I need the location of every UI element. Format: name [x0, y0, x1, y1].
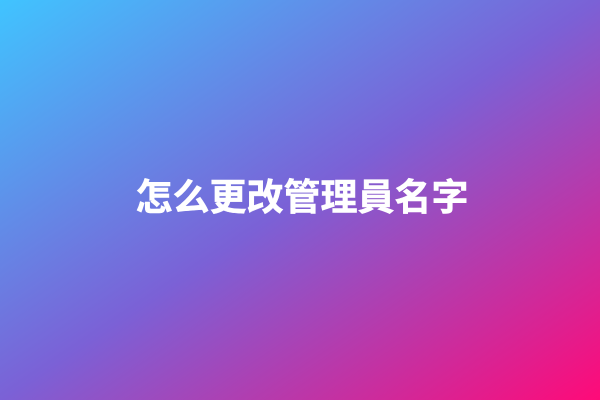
title: 怎么更改管理員名字	[136, 177, 468, 218]
